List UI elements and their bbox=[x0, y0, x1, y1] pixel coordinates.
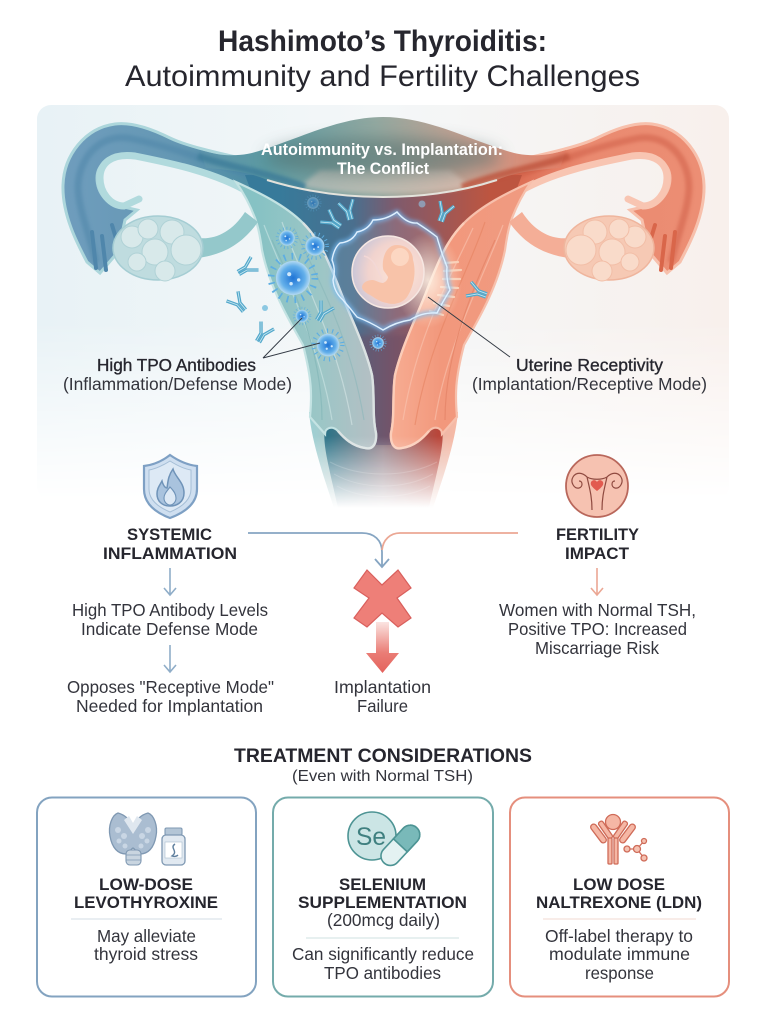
text: antibody levels: High TPO Antibody Levels bbox=[72, 600, 268, 620]
card title bbox=[536, 875, 702, 912]
left ovary bbox=[113, 216, 203, 281]
heading: treatment considerations: (Even with Normal TSH) bbox=[292, 768, 473, 785]
divider bbox=[306, 937, 459, 939]
card description: Can significantly reduce bbox=[292, 944, 474, 964]
card description bbox=[292, 944, 474, 983]
antibodies bbox=[226, 199, 489, 345]
heading: fertility impact bbox=[556, 525, 640, 563]
fundus heading bbox=[261, 141, 503, 178]
icon: shield with flame bbox=[144, 455, 197, 518]
panel background bbox=[37, 105, 729, 434]
right ovarian ligament bbox=[509, 212, 569, 258]
title: Autoimmunity and Fertility Challenges bbox=[125, 60, 640, 93]
right ovary bbox=[564, 216, 654, 281]
cervix lower bands bbox=[330, 462, 437, 489]
right fallopian tube bbox=[512, 122, 706, 275]
text: antibody levels: Indicate Defense Mode bbox=[81, 619, 258, 639]
text: implantation failure bbox=[334, 677, 431, 716]
immune cells bbox=[262, 196, 426, 359]
text: implantation failure: Implantation bbox=[334, 677, 431, 697]
heading: treatment considerations bbox=[234, 745, 532, 785]
arrow: antibody levels to receptive mode bbox=[164, 645, 176, 672]
card title: SUPPLEMENTATION bbox=[298, 893, 467, 912]
card border bbox=[273, 798, 493, 996]
fundus heading: Autoimmunity vs. Implantation: bbox=[261, 141, 503, 159]
card description: May alleviate bbox=[97, 926, 196, 946]
title bbox=[125, 25, 640, 93]
card title: (200mcg daily) bbox=[327, 910, 440, 930]
glow outline bbox=[332, 212, 450, 330]
left ovarian ligament bbox=[198, 212, 258, 258]
card title: NALTREXONE (LDN) bbox=[536, 893, 702, 912]
panel: selenium supplementation bbox=[273, 798, 493, 996]
text: miscarriage risk: Positive TPO: Increased bbox=[508, 619, 687, 639]
text: opposes receptive mode bbox=[67, 677, 274, 716]
leader lines: high TPO antibodies bbox=[263, 318, 320, 358]
icon: uterus in circle bbox=[566, 455, 628, 517]
uterus illustration bbox=[63, 117, 704, 517]
text: miscarriage risk bbox=[499, 600, 696, 658]
heading: treatment considerations: TREATMENT CONSIDERATIONS bbox=[234, 745, 532, 767]
card description: response bbox=[585, 963, 654, 983]
icon: antibody and molecule bbox=[589, 814, 647, 864]
cervical canal bbox=[324, 428, 443, 502]
right wall bbox=[391, 182, 531, 448]
arrow: systemic to antibody levels bbox=[164, 568, 176, 595]
heading: systemic inflammation bbox=[103, 525, 237, 563]
divider bbox=[71, 918, 222, 920]
card border bbox=[37, 798, 256, 996]
central cavity bbox=[245, 175, 522, 445]
card description bbox=[94, 926, 198, 964]
label: high TPO antibodies: (Inflammation/Defense Mode) bbox=[63, 374, 292, 394]
icon: selenium and capsule: Se bbox=[356, 823, 386, 851]
card border bbox=[510, 798, 729, 996]
label: high TPO antibodies: High TPO Antibodies bbox=[97, 355, 256, 375]
panel: low dose naltrexone bbox=[510, 798, 729, 996]
panel: autoimmunity vs implantation illustration bbox=[37, 105, 729, 517]
label: high TPO antibodies bbox=[63, 355, 292, 394]
cervix outer rim bbox=[309, 412, 458, 501]
label: uterine receptivity: (Implantation/Receptive Mode) bbox=[472, 374, 707, 394]
text: opposes receptive mode: Needed for Implantation bbox=[76, 696, 263, 716]
icon: thyroid and pill bottle bbox=[109, 813, 185, 865]
arrow: fertility to miscarriage risk bbox=[591, 568, 603, 595]
implantation ridges bbox=[430, 262, 461, 315]
lower cavity shade bbox=[360, 335, 406, 446]
glow outline blur bbox=[332, 212, 450, 330]
heading: fertility impact: IMPACT bbox=[565, 544, 630, 563]
peach glow over wall bbox=[402, 236, 459, 324]
card description: Off-label therapy to bbox=[545, 926, 693, 946]
card title: LOW-DOSE bbox=[99, 875, 193, 894]
card description: modulate immune bbox=[549, 944, 690, 964]
card title bbox=[74, 875, 218, 912]
card title: LOW DOSE bbox=[573, 875, 665, 894]
text: miscarriage risk: Women with Normal TSH, bbox=[499, 600, 696, 620]
left fallopian tube bbox=[62, 122, 253, 275]
divider bbox=[543, 918, 696, 920]
left wall bbox=[236, 182, 376, 448]
connector: red branch bbox=[382, 533, 518, 550]
icon: red X bbox=[354, 570, 411, 627]
connector: blue branch bbox=[248, 533, 389, 567]
arrow: to implantation failure bbox=[366, 622, 399, 673]
text: implantation failure: Failure bbox=[357, 696, 408, 716]
fundus band bbox=[198, 117, 569, 197]
card description: TPO antibodies bbox=[324, 963, 441, 983]
fundus label shadow bbox=[265, 138, 501, 176]
embryo bbox=[352, 236, 424, 308]
heading: systemic inflammation: SYSTEMIC bbox=[127, 525, 212, 544]
text: miscarriage risk: Miscarriage Risk bbox=[535, 638, 659, 658]
icon: selenium and capsule bbox=[348, 812, 424, 869]
card description bbox=[545, 926, 693, 983]
card title: SELENIUM bbox=[339, 875, 426, 894]
panel: low-dose levothyroxine bbox=[37, 798, 256, 996]
heading: systemic inflammation: INFLAMMATION bbox=[103, 544, 237, 563]
card title bbox=[298, 875, 467, 930]
fundus heading: The Conflict bbox=[337, 160, 429, 178]
title: Hashimoto’s Thyroiditis: bbox=[218, 25, 547, 58]
card title: LEVOTHYROXINE bbox=[74, 893, 218, 912]
label: uterine receptivity bbox=[472, 355, 707, 394]
label: uterine receptivity: Uterine Receptivity bbox=[516, 355, 663, 375]
card description: thyroid stress bbox=[94, 944, 198, 964]
leader line: uterine receptivity bbox=[428, 297, 510, 357]
heading: fertility impact: FERTILITY bbox=[556, 525, 640, 544]
text: antibody levels bbox=[72, 600, 268, 639]
text: opposes receptive mode: Opposes "Receptive Mode" bbox=[67, 677, 274, 697]
